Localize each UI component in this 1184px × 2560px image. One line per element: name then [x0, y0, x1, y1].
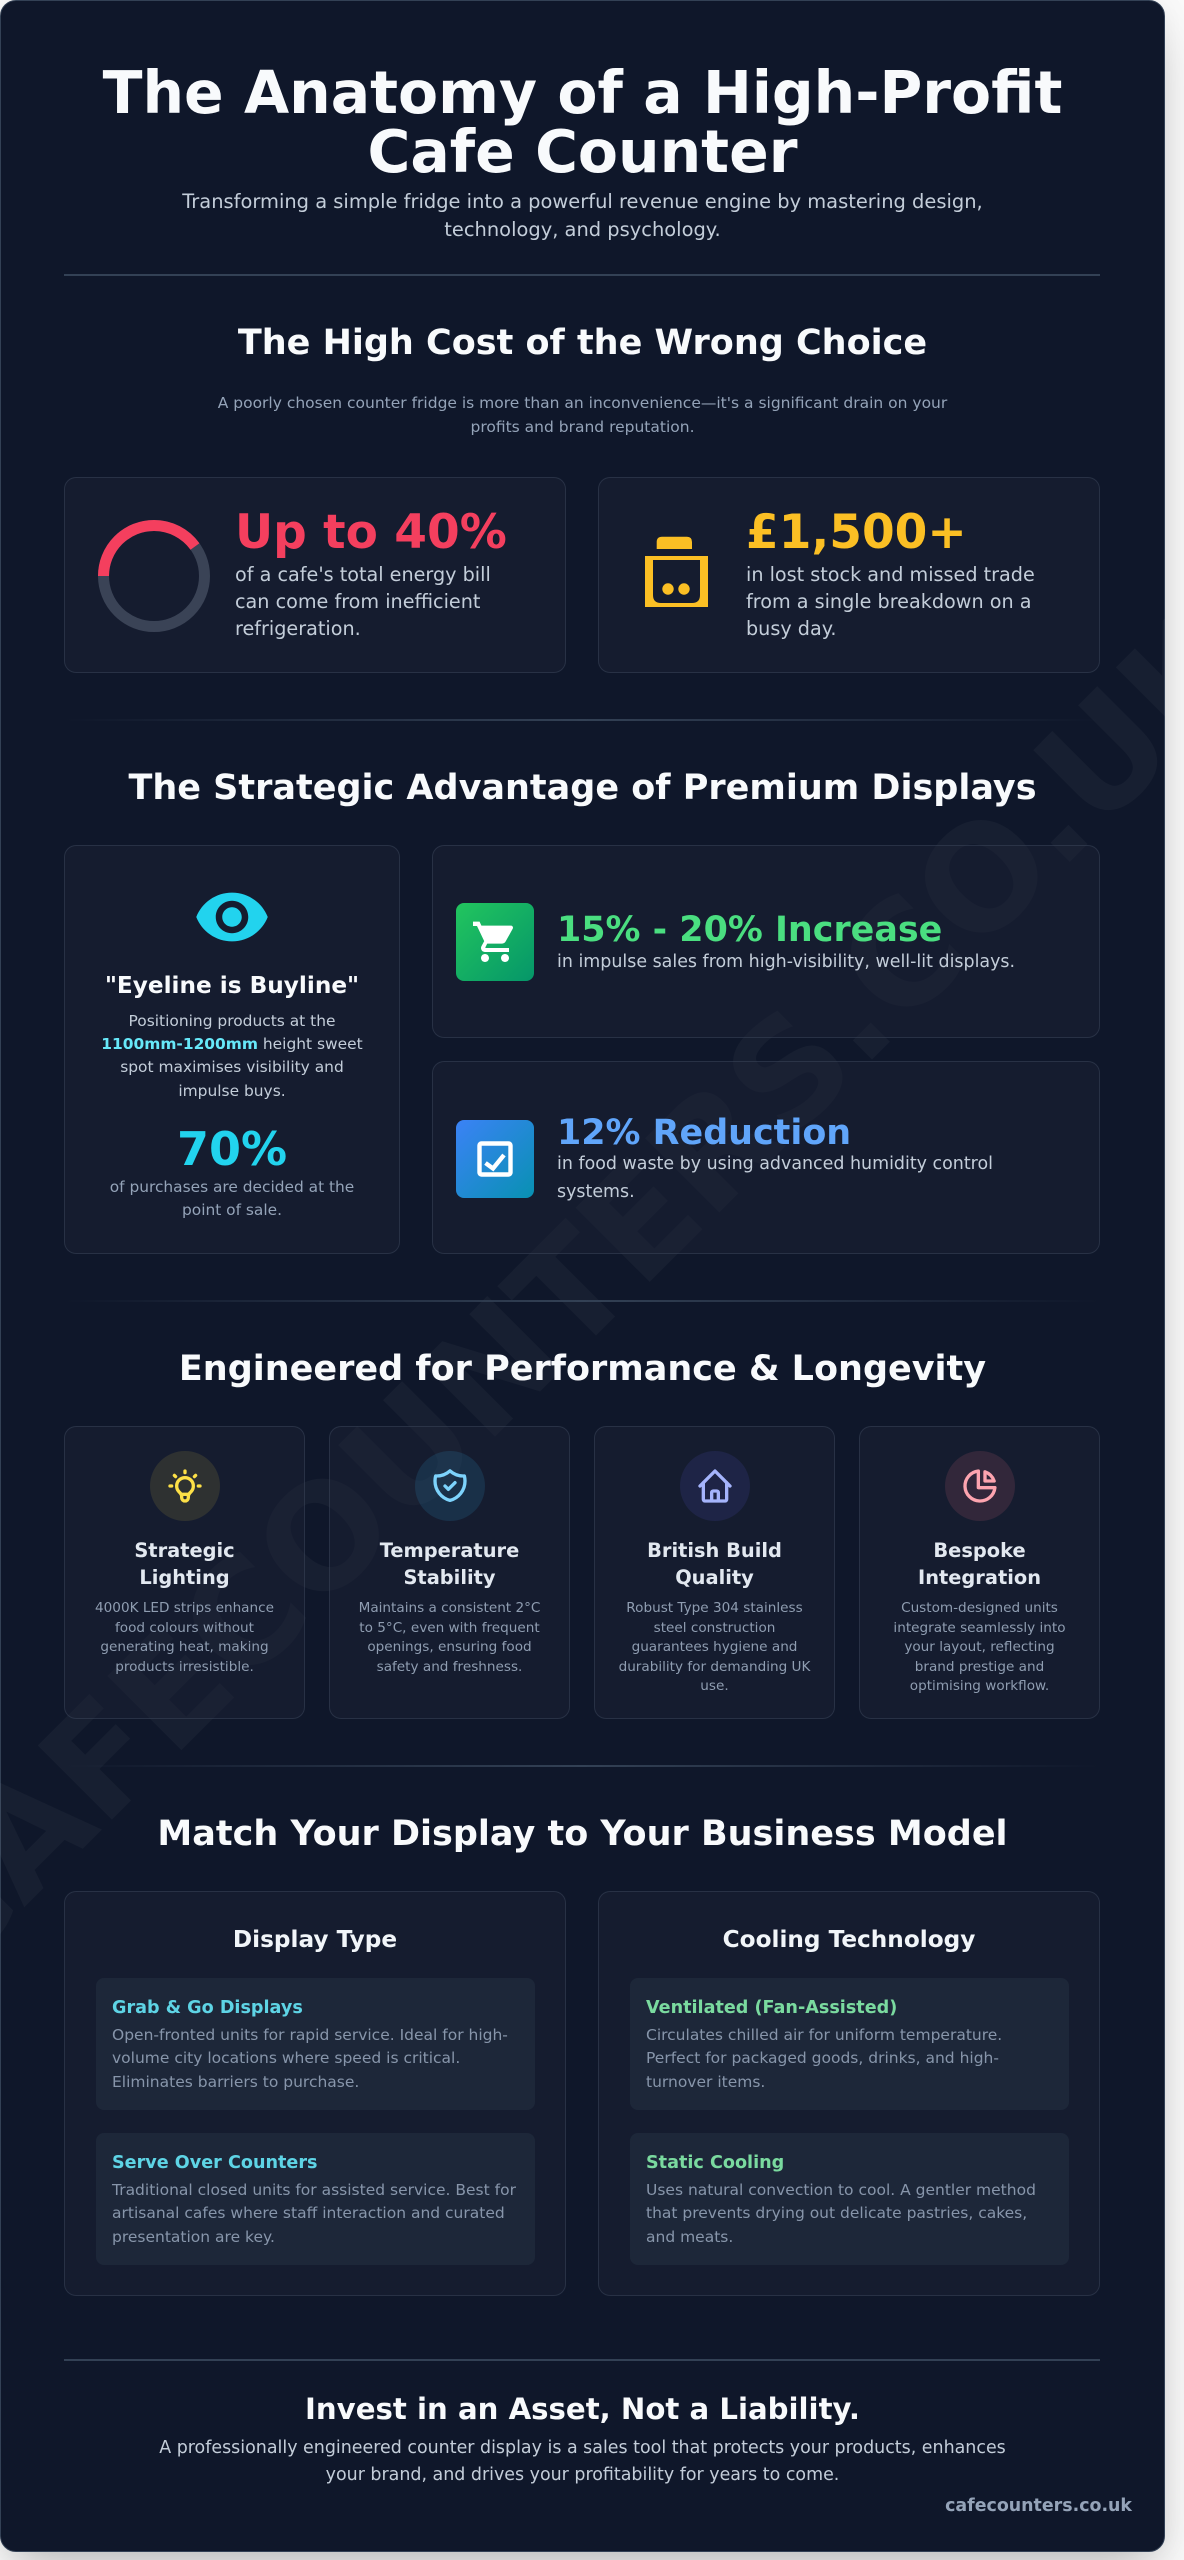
stat description: can come from inefficient [235, 590, 480, 612]
feature title: Integration [918, 1566, 1041, 1588]
stat description [557, 1154, 993, 1202]
stat description: from a single breakdown on a [746, 590, 1031, 612]
brand url: cafecounters.co.uk [945, 2496, 1132, 2516]
icon: shield [414, 1451, 484, 1521]
stat: up to 40 percent: Up to 40% [235, 505, 507, 560]
panel: bespoke integration [859, 1426, 1100, 1719]
option: serve over counters [96, 2133, 535, 2265]
option text [112, 2026, 508, 2091]
option text: and meats. [646, 2228, 733, 2246]
feature title: British Build [647, 1538, 782, 1562]
feature text: steel construction [654, 1620, 775, 1636]
stat description: of purchases are decided at the [110, 1178, 354, 1196]
feature text [619, 1600, 811, 1694]
stat description: systems. [557, 1182, 635, 1202]
option: ventilated [630, 1978, 1069, 2110]
option text: Open-fronted units for rapid service. Ideal for high- [112, 2026, 508, 2044]
feature text: your layout, reflecting [904, 1639, 1055, 1655]
option text: Circulates chilled air for uniform temperature. [646, 2026, 1002, 2044]
stat description: point of sale. [182, 1201, 282, 1219]
panel: impulse sales [432, 845, 1100, 1038]
option text [646, 2181, 1036, 2246]
stat description: refrigeration. [235, 616, 361, 640]
feature text: to 5°C, even with frequent [359, 1620, 540, 1636]
title: Cafe Counter [367, 118, 798, 186]
feature title: Temperature [380, 1538, 519, 1562]
option text [646, 2026, 1002, 2091]
option: static cooling [630, 2133, 1069, 2265]
option text: presentation are key. [112, 2228, 275, 2246]
icon: checkbox [456, 1120, 534, 1198]
heading: engineered: Engineered for Performance & Longevity [179, 1348, 986, 1388]
feature text: openings, ensuring food [367, 1639, 532, 1655]
callout text: Positioning products at the [129, 1012, 335, 1030]
feature text: safety and freshness. [377, 1659, 522, 1675]
feature text: brand prestige and [915, 1659, 1044, 1675]
icon: eye [196, 892, 268, 942]
heading: strategic advantage: The Strategic Advantage of Premium Displays [128, 768, 1037, 808]
feature title: Quality [675, 1566, 754, 1588]
stat: 12 percent reduction: 12% Reduction [557, 1112, 851, 1152]
feature text: Robust Type 304 stainless [626, 1600, 803, 1616]
stat description: of a cafe's total energy bill [235, 562, 491, 586]
stat: 1500 pounds: £1,500+ [746, 505, 967, 560]
icon: 40 percent donut [98, 520, 210, 632]
feature text: durability for demanding UK [619, 1659, 810, 1675]
option text: Traditional closed units for assisted service. Best for [112, 2181, 516, 2199]
option text: volume city locations where speed is critical. [112, 2049, 460, 2067]
feature title [647, 1538, 782, 1588]
callout text: impulse buys. [178, 1082, 286, 1100]
feature text: Maintains a consistent 2°C [359, 1600, 540, 1616]
feature title: Strategic [134, 1538, 235, 1562]
footer heading: Invest in an Asset, Not a Liability. [305, 2392, 860, 2426]
subtitle [182, 190, 983, 241]
footer text [159, 2438, 1006, 2484]
stat description [746, 562, 1035, 640]
icon: house [680, 1451, 750, 1521]
feature title [918, 1538, 1041, 1588]
subtitle: technology, and psychology. [444, 218, 721, 241]
panel: temperature stability [329, 1426, 570, 1719]
stat description [110, 1178, 354, 1219]
option text: Perfect for packaged goods, drinks, and high- [646, 2049, 999, 2067]
panel: cooling technology [598, 1891, 1100, 2296]
option text [112, 2181, 516, 2246]
feature title [380, 1538, 519, 1588]
icon: light bulb [150, 1451, 220, 1521]
title [102, 59, 1062, 186]
option text: that prevents drying out delicate pastries, cakes, [646, 2204, 1027, 2222]
panel: food waste [432, 1061, 1100, 1254]
callout text [101, 1012, 363, 1100]
stat: 15 to 20 percent increase: 15% - 20% Increase [557, 910, 942, 950]
feature text [893, 1600, 1066, 1694]
panel: display type [64, 1891, 566, 2296]
heading: match your display: Match Your Display to Your Business Model [157, 1814, 1008, 1854]
stat description: in impulse sales from high-visibility, well-lit displays. [557, 952, 1015, 972]
footer text: A professionally engineered counter display is a sales tool that protects your products, enhances [159, 2438, 1006, 2458]
feature text: guarantees hygiene and [632, 1639, 797, 1655]
intro paragraph: high cost [218, 394, 948, 436]
intro paragraph: high cost: profits and brand reputation. [470, 418, 694, 436]
feature title [134, 1538, 235, 1588]
panel heading: Cooling Technology [723, 1926, 975, 1952]
intro paragraph: high cost: A poorly chosen counter fridge is more than an inconvenience—it's a significant drain on your [218, 394, 947, 412]
footer text: your brand, and drives your profitability for years to come. [326, 2464, 839, 2484]
option text: turnover items. [646, 2073, 765, 2091]
panel: breakdown cost [598, 477, 1100, 673]
stat description: in lost stock and missed trade [746, 562, 1035, 586]
option title: Static Cooling [646, 2153, 784, 2173]
feature text: food colours without [115, 1620, 254, 1636]
feature title: Stability [403, 1566, 496, 1588]
stat description: busy day. [746, 616, 836, 640]
feature title: Bespoke [933, 1538, 1026, 1562]
feature title: Lighting [139, 1566, 230, 1588]
feature text: optimising workflow. [910, 1678, 1049, 1694]
option text: Uses natural convection to cool. A gentler method [646, 2181, 1036, 2199]
icon: fridge [645, 536, 708, 607]
subtitle: Transforming a simple fridge into a powerful revenue engine by mastering design, [182, 190, 983, 213]
option title: Ventilated (Fan-Assisted) [646, 1998, 897, 2018]
option title: Grab & Go Displays [112, 1998, 303, 2018]
feature text: generating heat, making [100, 1639, 269, 1655]
feature text: integrate seamlessly into [893, 1620, 1066, 1636]
icon: pie chart [944, 1451, 1014, 1521]
feature text: Custom-designed units [901, 1600, 1058, 1616]
panel: strategic lighting [64, 1426, 305, 1719]
title: The Anatomy of a High-Profit [103, 59, 1062, 127]
feature text: use. [700, 1678, 729, 1694]
feature text [95, 1600, 274, 1675]
callout text: 1100mm-1200mm height sweet [101, 1035, 363, 1053]
callout title: "Eyeline is Buyline" [105, 972, 359, 999]
panel heading: Display Type [233, 1926, 397, 1952]
panel: british build quality [594, 1426, 835, 1719]
stat description [235, 562, 491, 640]
stat description: in food waste by using advanced humidity control [557, 1154, 993, 1174]
heading: high cost: The High Cost of the Wrong Choice [238, 322, 927, 362]
option text: artisanal cafes where staff interaction and curated [112, 2204, 505, 2222]
icon: shopping cart [456, 903, 534, 981]
feature text: products irresistible. [115, 1659, 254, 1675]
option title: Serve Over Counters [112, 2153, 318, 2173]
feature text [359, 1600, 540, 1675]
panel: eyeline is buyline [64, 845, 400, 1254]
panel: energy cost [64, 477, 566, 673]
option text: Eliminates barriers to purchase. [112, 2073, 359, 2091]
option: grab and go [96, 1978, 535, 2110]
stat: 70 percent: 70% [177, 1122, 287, 1176]
feature text: 4000K LED strips enhance [95, 1600, 274, 1616]
callout text: spot maximises visibility and [120, 1058, 344, 1076]
